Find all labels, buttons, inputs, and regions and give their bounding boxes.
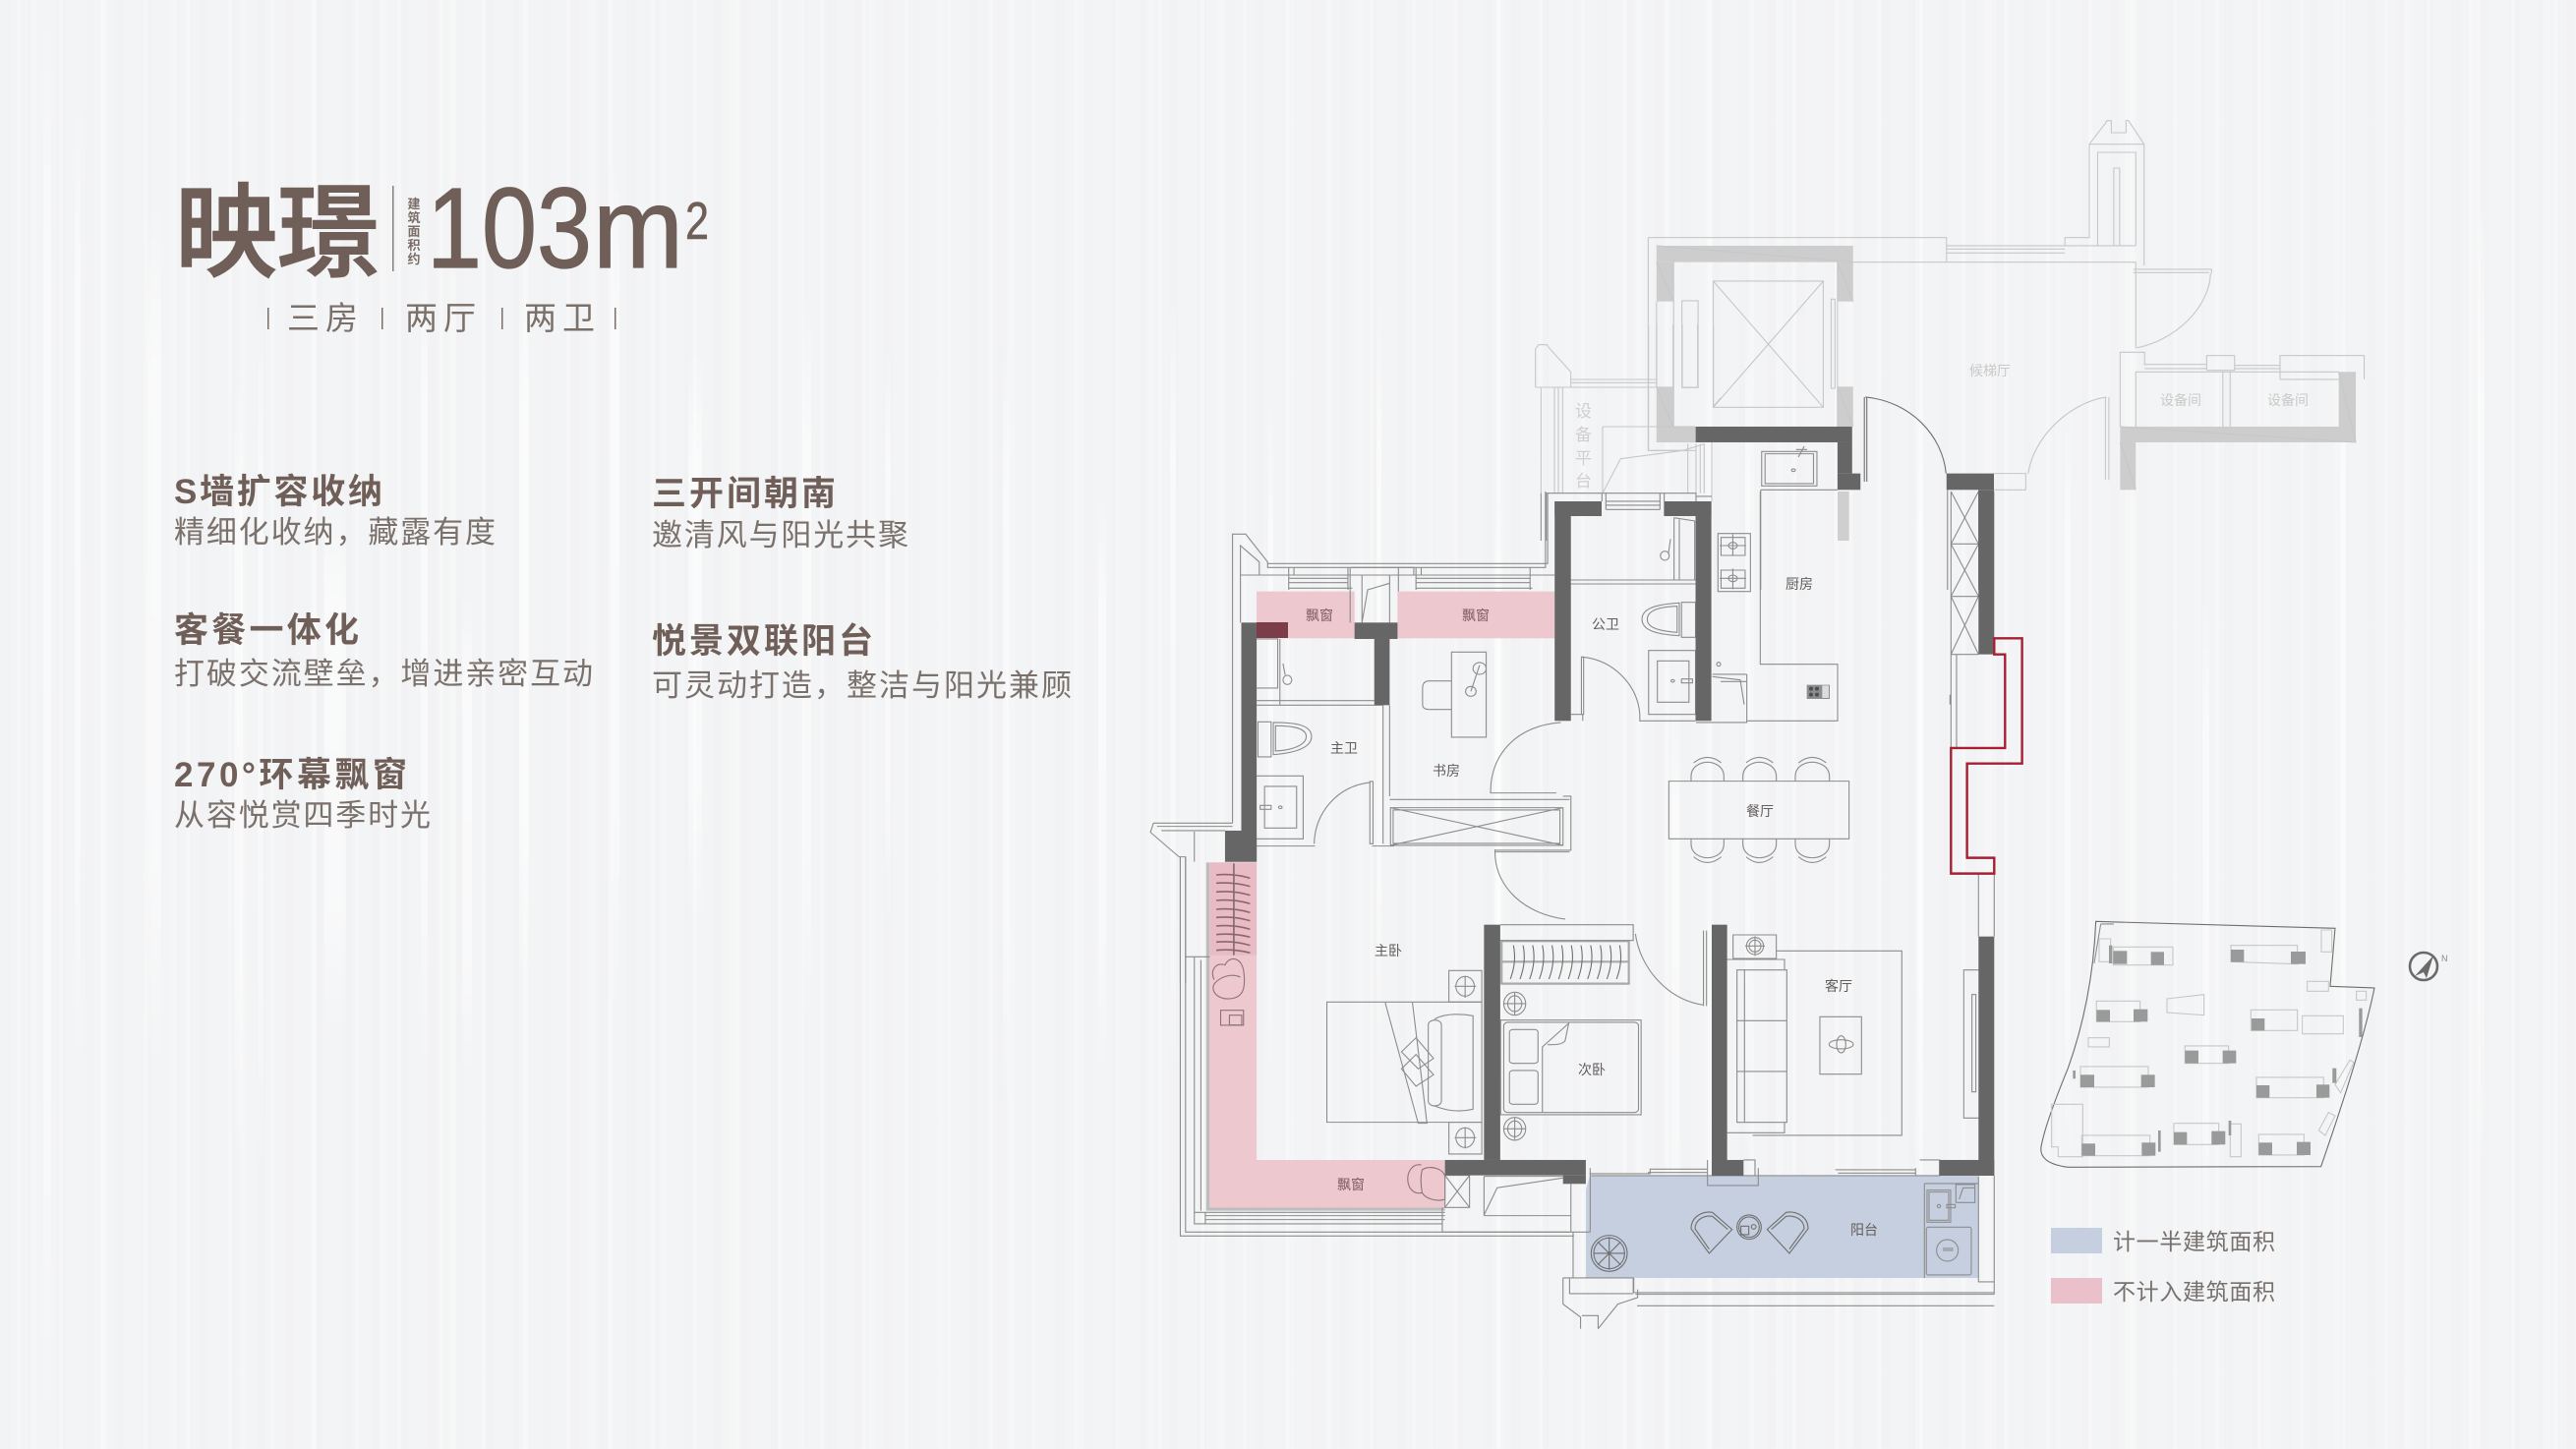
area value: 103m²: 2 xyxy=(685,192,709,251)
dining table and chairs xyxy=(1669,757,1849,862)
area caption: 建筑面积约: 筑 xyxy=(407,210,421,225)
title: 映璟: 映璟 xyxy=(175,177,380,291)
text: 设备平台: 平 xyxy=(1575,449,1592,468)
toilet, master bathroom xyxy=(1258,722,1312,757)
room configuration: 三房 两厅 两卫: 两卫 xyxy=(524,300,595,336)
area caption: 建筑面积约: 约 xyxy=(407,252,421,266)
feature: 客餐一体化: 打破交流壁垒，增进亲密互动 xyxy=(174,657,593,691)
nightstands xyxy=(1449,970,1482,1154)
feature: 三开间朝南 xyxy=(652,475,908,552)
overlap of wall and pink xyxy=(1257,622,1288,638)
area value: 103m² xyxy=(427,164,709,292)
master bed xyxy=(1327,1002,1482,1124)
cooktop on island xyxy=(1807,685,1830,699)
second bed and lamps xyxy=(1500,992,1641,1140)
feature: 客餐一体化: 客餐一体化 xyxy=(174,611,359,650)
balcony parapet xyxy=(1634,1176,1994,1305)
outline buildings xyxy=(2052,930,2367,1157)
feature: S墙扩容收纳: S墙扩容收纳 xyxy=(174,473,382,511)
room labels xyxy=(1306,576,1878,1238)
text: lobby room labels xyxy=(1969,363,2309,408)
feature: 270°环幕飘窗 xyxy=(174,756,431,833)
lounge chairs in bay window xyxy=(1212,958,1445,1200)
site key plan xyxy=(2041,921,2374,1167)
legend xyxy=(2051,1228,2275,1304)
door, second bedroom xyxy=(1500,925,1707,1006)
side table xyxy=(1733,935,1777,958)
door, public bathroom xyxy=(1571,657,1696,721)
area value: 103m²: m xyxy=(593,164,683,292)
text: 设备平台: 台 xyxy=(1575,472,1592,491)
room configuration: 三房 两厅 两卫: 三房 xyxy=(287,300,358,336)
room labels: 飘窗 xyxy=(1337,1177,1365,1192)
feature: 悦景双联阳台 xyxy=(652,622,1072,703)
plan linework: bedrooms xyxy=(1180,857,1707,1329)
icon: north compass xyxy=(2410,953,2448,980)
room labels: 餐厅 xyxy=(1746,803,1774,819)
tall cabinet xyxy=(1951,492,1978,655)
stove xyxy=(1718,534,1750,592)
room labels: 次卧 xyxy=(1578,1062,1606,1077)
area caption: 建筑面积约: 建 xyxy=(407,197,421,211)
dining cabinet below S-wall xyxy=(1950,655,2114,963)
door, master bathroom xyxy=(1257,782,1394,846)
wardrobe, second bedroom xyxy=(1501,941,1629,984)
balcony chairs and table xyxy=(1691,1212,1808,1253)
room labels: 飘窗 xyxy=(1462,608,1490,623)
text: lobby room labels: 设备间 xyxy=(2267,392,2309,408)
room labels: 书房 xyxy=(1433,763,1460,779)
room labels: 阳台 xyxy=(1850,1222,1878,1238)
feature: 悦景双联阳台: 可灵动打造，整洁与阳光兼顾 xyxy=(652,668,1072,703)
panel: non-counted bay window areas (pink) xyxy=(1206,592,1554,1211)
site boundary xyxy=(2041,921,2374,1167)
icon: north compass: N xyxy=(2441,954,2448,963)
room labels: 主卫 xyxy=(1330,740,1358,756)
plan linework: kitchen and dining xyxy=(1669,492,2114,963)
feature: 客餐一体化 xyxy=(174,611,593,691)
feature: S墙扩容收纳: 精细化收纳，藏露有度 xyxy=(174,515,496,550)
room configuration: 三房 两厅 两卫: 两厅 xyxy=(405,300,476,336)
room labels: 主卧 xyxy=(1375,943,1402,958)
rug and coffee table xyxy=(1753,951,1902,1135)
panel: half-counted balcony (blue) xyxy=(1586,1176,1978,1278)
legend item: half-counted area: 计一半建筑面积 xyxy=(2113,1229,2275,1254)
room labels: 客厅 xyxy=(1825,978,1852,994)
legend item: not counted area: 不计入建筑面积 xyxy=(2113,1279,2275,1304)
feature: 三开间朝南: 邀清风与阳光共聚 xyxy=(652,518,908,552)
vanity, master bathroom xyxy=(1257,776,1303,839)
area value: 103m²: 103 xyxy=(427,164,592,292)
text: 设备平台: 备 xyxy=(1575,426,1592,444)
legend item: not counted area xyxy=(2051,1278,2275,1304)
storage wardrobe with cross xyxy=(1389,796,1571,850)
area caption: 建筑面积约: 积 xyxy=(407,238,421,253)
TV cabinet xyxy=(1963,970,1979,1118)
room labels: 飘窗 xyxy=(1306,608,1333,623)
plan linework: north rooms xyxy=(1150,492,1750,983)
S-wall red outline xyxy=(1951,638,2022,874)
fixtures, public bathroom xyxy=(1642,539,1696,715)
room configuration: 三房 两厅 两卫 xyxy=(267,300,615,336)
hanging rail in pink strip xyxy=(1216,863,1250,956)
wardrobe hangers xyxy=(1510,946,1621,979)
feature: S墙扩容收纳 xyxy=(174,473,496,550)
feature: 悦景双联阳台: 悦景双联阳台 xyxy=(652,622,873,661)
public bathroom window xyxy=(1541,493,1712,541)
feature: 270°环幕飘窗: 270°环幕飘窗 xyxy=(174,756,407,794)
feature: 三开间朝南: 三开间朝南 xyxy=(652,475,836,513)
structural walls xyxy=(1225,427,1994,1184)
doors, study and master bedroom xyxy=(1491,723,1569,919)
room labels: 公卫 xyxy=(1592,616,1619,632)
title divider xyxy=(392,186,393,271)
equipment platform, west side xyxy=(1536,324,1721,501)
plant xyxy=(1591,1236,1627,1271)
legend item: half-counted area xyxy=(2051,1228,2275,1254)
south balcony door and parapet xyxy=(1442,1168,1638,1329)
plan linework: living room and balcony xyxy=(1590,935,1994,1305)
sofa xyxy=(1727,959,1786,1132)
building cores xyxy=(2073,946,2363,1156)
text: lobby room labels: 设备间 xyxy=(2160,392,2201,408)
kitchen sink xyxy=(1761,446,1948,590)
text: lobby room labels: 候梯厅 xyxy=(1969,363,2011,378)
text: 设备平台: 设 xyxy=(1575,402,1592,421)
desk xyxy=(1423,652,1487,737)
upper lobby core (faded) xyxy=(1648,121,2365,490)
feature: 270°环幕飘窗: 从容悦赏四季时光 xyxy=(174,798,431,833)
room labels: 厨房 xyxy=(1786,576,1813,592)
floor plan xyxy=(1150,121,2365,1329)
balcony laundry xyxy=(1924,1184,1978,1278)
area caption: 建筑面积约: 面 xyxy=(407,224,421,239)
